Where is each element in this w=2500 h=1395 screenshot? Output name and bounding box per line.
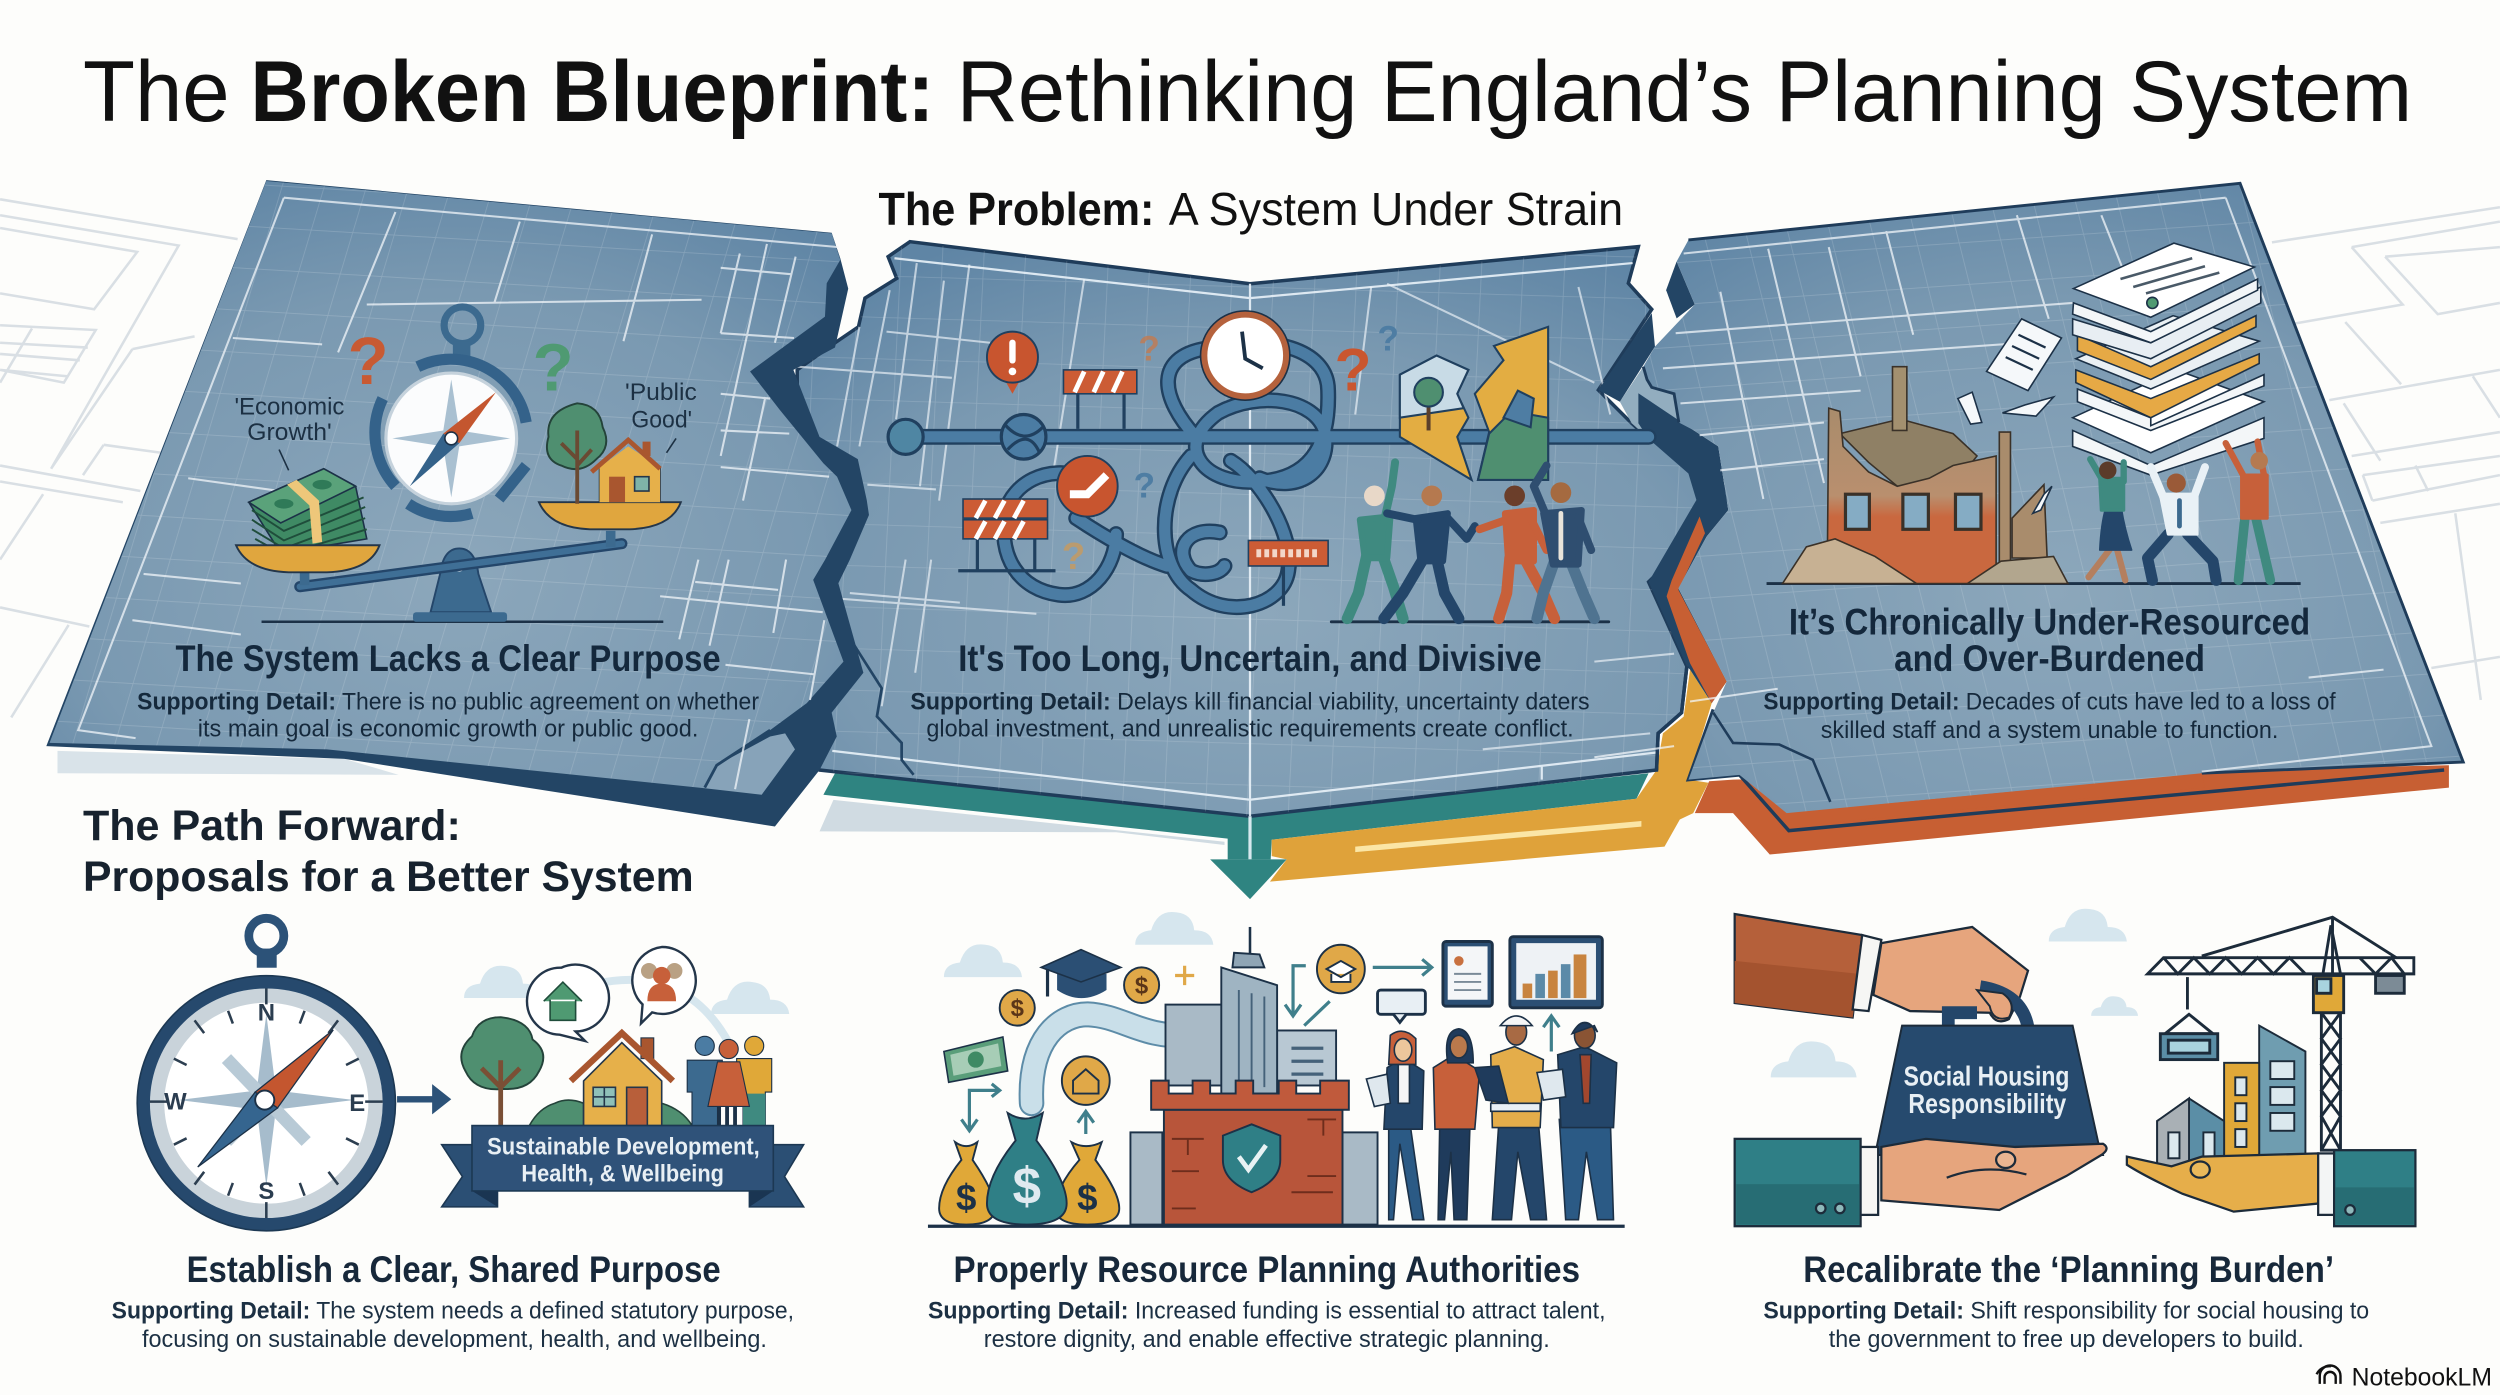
icon: yellow hand with sleeve xyxy=(2127,1150,2415,1226)
text: recalibrate the planning burden xyxy=(1763,1249,2369,1353)
label: economic growth: 'Economic xyxy=(234,394,344,421)
icon: tangled road xyxy=(909,343,1649,607)
text: system lacks a clear purpose: Supporting Detail: There is no public agreement on whether xyxy=(137,688,759,715)
text: system lacks a clear purpose xyxy=(137,638,759,743)
illustration: tangled road and conflict xyxy=(888,311,1649,622)
panel: system too long, uncertain, divisive xyxy=(797,242,1730,816)
text: under-resourced and over-burdened: It’s Chronically Under-Resourced xyxy=(1789,602,2310,643)
icon: loose papers xyxy=(1958,319,2061,513)
icon: clouds xyxy=(944,912,1213,977)
illustration: scales and compass xyxy=(234,307,697,622)
icon: money bags: $ xyxy=(1077,1177,1098,1218)
text: too long, uncertain, divisive: global investment, and unrealistic requirements create conflict. xyxy=(926,716,1574,743)
icon: large compass xyxy=(137,918,395,1231)
icon: question marks: ? xyxy=(348,324,389,399)
text: system lacks a clear purpose: its main goal is economic growth or public good. xyxy=(198,716,698,743)
icon: right pan xyxy=(539,502,681,529)
text: under-resourced and over-burdened xyxy=(1763,602,2336,744)
text: recalibrate the planning burden: the government to free up developers to build. xyxy=(1829,1326,2304,1353)
icon: bottom left hand xyxy=(1735,1139,2107,1226)
icon: floating question marks: ? xyxy=(1334,336,1372,404)
text: under-resourced and over-burdened: Supporting Detail: Decades of cuts have led to a loss of xyxy=(1763,688,2336,715)
faint blueprint lines left xyxy=(0,199,238,717)
icon: tree xyxy=(461,1017,543,1126)
icon: floating question marks xyxy=(1062,320,1399,578)
icon: money bags: $ xyxy=(956,1177,977,1218)
icon: top hand thumb xyxy=(1977,990,2012,1019)
icon: buildings xyxy=(2157,1026,2305,1166)
icon: no entry sign xyxy=(1057,456,1118,517)
icon: floating question marks: ? xyxy=(1378,320,1399,359)
icon: arguing people xyxy=(1331,462,1609,622)
icon: clock xyxy=(1201,311,1290,400)
icon: people lifting xyxy=(2089,442,2270,580)
icon: delay sign xyxy=(1248,540,1328,606)
label: public good xyxy=(625,379,697,453)
heading: the path forward: The Path Forward: xyxy=(83,802,461,850)
text: properly resource planning authorities: Supporting Detail: Increased funding is essential to attract talent, xyxy=(928,1297,1606,1324)
icon: banner with text xyxy=(442,1126,804,1207)
text: under-resourced and over-burdened: skilled staff and a system unable to function. xyxy=(1821,717,2278,744)
text: establish shared purpose xyxy=(112,1249,794,1353)
icon: graduation cap xyxy=(1041,950,1121,998)
icon: planners team xyxy=(1366,1016,1617,1220)
logo: NotebookLM: NotebookLM xyxy=(2352,1364,2492,1391)
arrow: funding swoosh xyxy=(1031,1009,1215,1103)
icon: money stack xyxy=(249,469,367,555)
illustration: resourcing planning authorities xyxy=(928,912,1625,1226)
title: Rethinking England’s Planning System xyxy=(957,44,2412,140)
icon: large compass: S xyxy=(258,1178,274,1205)
icon: large compass: E xyxy=(349,1090,365,1117)
illustration: crumbling building and paper stack xyxy=(1767,243,2301,584)
icon: clouds xyxy=(1771,909,2138,1077)
thin crack in center panel xyxy=(853,643,914,775)
text: recalibrate the planning burden: Supporting Detail: Shift responsibility for social housing to xyxy=(1763,1297,2369,1324)
title xyxy=(83,44,2412,140)
label: economic growth: Growth' xyxy=(247,419,332,446)
icon: compass xyxy=(375,307,526,516)
panel: system lacks a clear purpose xyxy=(46,180,869,826)
icon: barrier lower xyxy=(958,499,1055,571)
icon: coins: $ xyxy=(1011,995,1024,1022)
heading: the path forward: Proposals for a Better System xyxy=(83,853,694,901)
icon: bushes xyxy=(529,1100,692,1126)
text: establish shared purpose: focusing on sustainable development, health, and wellbeing. xyxy=(142,1326,767,1353)
icon: house xyxy=(571,1033,673,1126)
icon: social housing weight: Responsibility xyxy=(1908,1088,2067,1119)
text: recalibrate the planning burden: Recalibrate the ‘Planning Burden’ xyxy=(1803,1249,2334,1290)
label: public good: 'Public xyxy=(625,379,697,406)
heading: the problem xyxy=(879,183,1623,235)
icon: left pan xyxy=(236,545,380,572)
arrow: compass to community xyxy=(397,1084,451,1114)
text: too long, uncertain, divisive xyxy=(910,638,1590,743)
icon: clouds and arc xyxy=(464,966,789,1043)
icon: barrier top xyxy=(1063,370,1137,429)
icon: brick tower xyxy=(1151,1081,1349,1225)
text: system lacks a clear purpose: The System Lacks a Clear Purpose xyxy=(175,638,721,679)
icon: coins: $ xyxy=(1135,972,1149,999)
text: properly resource planning authorities: restore dignity, and enable effective strategic planning. xyxy=(984,1326,1550,1353)
text: properly resource planning authorities: Properly Resource Planning Authorities xyxy=(953,1249,1580,1290)
title: Broken Blueprint: xyxy=(250,44,934,140)
text: too long, uncertain, divisive: Supporting Detail: Delays kill financial viability, uncertainty daters xyxy=(910,688,1590,715)
icon: small arrows xyxy=(961,959,1559,1134)
icon: question marks: ? xyxy=(533,331,573,406)
illustration: hands transferring social housing responsibility xyxy=(1735,909,2415,1226)
icon: document, monitor and callout xyxy=(1378,937,1602,1022)
text: under-resourced and over-burdened: and Over-Burdened xyxy=(1894,638,2205,679)
panel: chronically under-resourced xyxy=(1594,183,2463,831)
text: establish shared purpose: Supporting Detail: The system needs a defined statutory purpose, xyxy=(112,1297,794,1324)
icon: knot xyxy=(1001,415,1046,459)
icon: ruined building xyxy=(1782,367,2068,584)
heading: the problem: The Problem: xyxy=(879,183,1154,235)
text: too long, uncertain, divisive: It's Too Long, Uncertain, and Divisive xyxy=(958,638,1542,679)
icon: floating question marks: ? xyxy=(1138,329,1160,368)
icon: floating question marks: ? xyxy=(1062,535,1085,578)
panel shadow and colored backings xyxy=(57,670,2449,882)
illustration: compass to sustainable development xyxy=(137,918,804,1231)
icon: home speech bubble xyxy=(527,965,609,1041)
label: public good: Good' xyxy=(631,406,692,433)
icon: banner with text: Health, & Wellbeing xyxy=(521,1160,724,1187)
icon: money bags xyxy=(939,1113,1119,1225)
icon: alert pin xyxy=(987,332,1038,394)
heading: the path forward xyxy=(83,802,694,901)
icon: large compass: N xyxy=(258,999,275,1026)
icon: people speech bubble xyxy=(632,947,696,1024)
icon: family xyxy=(687,1036,772,1126)
icon: money bags: $ xyxy=(1013,1156,1041,1215)
title: The xyxy=(83,44,230,140)
icon: floating question marks: ? xyxy=(1134,466,1155,505)
icon: coins xyxy=(1000,945,1365,1105)
icon: social housing weight xyxy=(1875,987,2103,1155)
icon: plus xyxy=(1175,966,1194,985)
icon: social housing weight: Social Housing xyxy=(1904,1060,2069,1092)
icon: paper stack xyxy=(2073,243,2264,475)
icon: large compass: W xyxy=(164,1089,187,1116)
icon: tower crane xyxy=(2148,917,2414,1150)
arrow down to proposals xyxy=(1210,816,1287,899)
icon: banner with text: Sustainable Development, xyxy=(487,1133,760,1160)
faint blueprint lines right xyxy=(2272,207,2500,700)
text: establish shared purpose: Establish a Clear, Shared Purpose xyxy=(187,1249,721,1290)
label: economic growth xyxy=(234,394,344,470)
heading: the problem: A System Under Strain xyxy=(1169,183,1623,235)
icon: top hand with sleeve xyxy=(1735,914,2028,1021)
icon: dollar bill xyxy=(944,1037,1008,1082)
icon: question marks xyxy=(348,324,573,406)
icon: grey city buildings xyxy=(1130,927,1378,1225)
text: properly resource planning authorities xyxy=(928,1249,1606,1353)
icon: split landscape xyxy=(1400,327,1548,480)
icon: house xyxy=(592,440,660,502)
icon: tree xyxy=(547,403,606,504)
